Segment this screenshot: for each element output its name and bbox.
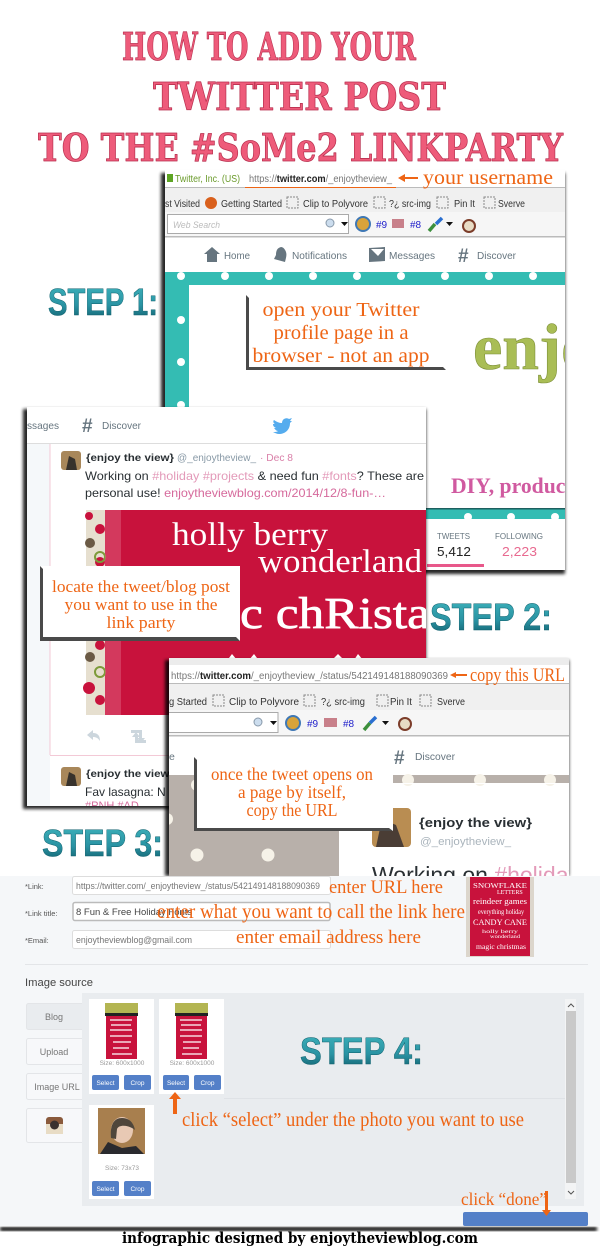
panel: step 1 browser screenshot: Messages — [389, 250, 435, 262]
image card 3 — [89, 1105, 154, 1199]
panel: step 3 tweet page screenshot: {enjoy the view} — [419, 815, 532, 830]
panel: step 1 browser screenshot: Notifications — [292, 250, 347, 262]
panel: step 1 browser screenshot: Pin It — [454, 199, 475, 210]
form thumbnail: LETTERS — [497, 890, 523, 896]
image source tabs: Upload — [40, 1047, 68, 1057]
profile stats: FOLLOWING — [495, 531, 543, 541]
form fields: https://twitter.com/_enjoytheview_/status/542149148188090369 — [76, 881, 320, 892]
panel: step 1 browser screenshot: ?¿ src-img — [389, 199, 431, 210]
profile stats — [427, 531, 543, 567]
form thumbnail: SNOWFLAKE — [473, 882, 527, 890]
panel: step 2 tweet screenshot: # — [82, 416, 93, 437]
callout: step 3: a page by itself, — [238, 782, 346, 802]
form fields: 8 Fun & Free Holiday Fonts — [76, 907, 192, 918]
image card 1 — [89, 999, 154, 1094]
panel: step 2 tweet screenshot: · Dec 8 — [260, 453, 293, 464]
callout: step 1: open your Twitter — [262, 299, 420, 321]
panel: step 1 browser screenshot: Home — [224, 250, 250, 262]
done button — [463, 1212, 588, 1226]
annotation: your username — [245, 165, 553, 189]
annotation: form field labels: enter email address here — [236, 927, 421, 948]
form thumbnail: everything holiday — [478, 908, 524, 916]
panel: step 3 tweet page screenshot: # — [394, 748, 405, 769]
annotation: your username: your username — [423, 165, 553, 189]
callout: step 3: once the tweet opens on — [211, 764, 373, 784]
panel: step 3 tweet page screenshot: @_enjoytheview_ — [420, 836, 512, 848]
image card 2: Size: 600x1000 — [170, 1060, 215, 1067]
annotation: form field labels: enter what you want to call the link here — [157, 901, 465, 923]
panel: step 3 tweet page screenshot: ?¿ src-img — [321, 697, 365, 708]
annotation: click select: click “select” under the photo you want to use — [182, 1109, 524, 1131]
callout: step 2: link party — [106, 613, 176, 632]
panel: step 2 tweet screenshot: @_enjoytheview_ — [177, 453, 256, 464]
callout: step 3: copy the URL — [246, 800, 338, 820]
callout: step 2: locate the tweet/blog post — [52, 577, 230, 596]
profile stats: 5,412 — [437, 544, 471, 559]
tweet avatar — [61, 451, 81, 470]
arrow: points to select button — [169, 1092, 181, 1114]
image card 3: Crop — [130, 1186, 145, 1193]
panel: step 1 browser screenshot: Twitter, Inc. (US) — [175, 174, 240, 185]
tweet image: holly berry wonderland: c chRista — [240, 589, 430, 638]
annotation: click done: click “done” — [461, 1189, 547, 1209]
panel: step 2 tweet screenshot: #PNH #AD — [85, 800, 139, 812]
tweet image: holly berry wonderland: holly berry — [172, 517, 329, 553]
annotation: form field labels — [157, 877, 465, 948]
panel: step 1 browser screenshot: # — [458, 246, 469, 267]
panel: step 3 tweet page screenshot: Pin It — [390, 697, 412, 708]
form fields: enjoytheviewblog@gmail.com — [76, 935, 192, 946]
image source tabs: Blog — [45, 1012, 63, 1022]
footer credit: infographic designed by enjoytheviewblog.com — [122, 1229, 478, 1247]
form thumbnail — [466, 877, 534, 957]
panel: step 2 tweet screenshot: {enjoy the view} — [86, 452, 174, 464]
image card 2: Crop — [200, 1080, 215, 1087]
panel: step 2 tweet screenshot — [23, 407, 430, 812]
panel: step 2 tweet screenshot: personal use! enjoytheviewblog.com/2014/12/8-fun-… — [85, 486, 386, 500]
panel: step 2 tweet screenshot: Fav lasagna: N — [85, 785, 166, 799]
callout: step 3 — [194, 757, 393, 831]
image card 1: Size: 600x1000 — [100, 1060, 145, 1067]
form fields: *Link title: — [25, 909, 58, 918]
form thumbnail: magic christmas — [476, 943, 526, 951]
title: TWITTER POST — [153, 74, 446, 119]
form fields: *Link: — [25, 882, 44, 891]
panel: step 1 browser screenshot: Clip to Polyvore — [303, 199, 368, 210]
step 1 label: STEP 1: — [48, 282, 158, 324]
image source tabs — [26, 1004, 86, 1142]
form fields — [25, 876, 330, 948]
panel: step 1 browser screenshot: Discover — [477, 250, 516, 262]
step 2 label: STEP 2: — [430, 597, 552, 639]
panel: step 3 tweet page screenshot: g Started — [169, 697, 207, 708]
profile stats: TWEETS — [437, 531, 470, 541]
image card 2 — [159, 999, 224, 1094]
panel: step 2 tweet screenshot: Working on #holiday #projects & need fun #fonts? These are — [85, 469, 424, 483]
panel: step 4 link party form — [0, 876, 600, 1231]
image card 2: Select — [167, 1080, 185, 1087]
panel: step 2 tweet screenshot: {enjoy the view} — [86, 768, 174, 780]
panel: step 1 browser screenshot — [161, 165, 600, 574]
panel: step 3 tweet page screenshot: Clip to Polyvore — [229, 697, 299, 708]
panel: step 1 browser screenshot: Web Search — [173, 220, 220, 231]
callout: step 2 — [40, 566, 240, 641]
panel: step 1 browser screenshot: Sverve — [498, 199, 525, 210]
panel: step 3 tweet page screenshot: Discover — [415, 751, 455, 763]
image card 3: Select — [96, 1186, 115, 1193]
profile stats: 2,223 — [502, 544, 537, 559]
title — [38, 24, 564, 170]
panel: step 3 tweet page screenshot — [160, 658, 580, 888]
title: HOW TO ADD YOUR — [122, 24, 416, 69]
panel: step 1 browser screenshot: #9 — [376, 220, 388, 231]
step 3 label: STEP 3: — [42, 823, 163, 865]
panel: step 3 tweet page screenshot: Sverve — [437, 697, 465, 708]
image source tabs: Image URL — [34, 1082, 80, 1092]
profile background with dots — [161, 774, 569, 876]
annotation: form field labels: enter URL here — [329, 877, 443, 898]
callout: step 2: you want to use in the — [64, 595, 218, 614]
panel: step 3 tweet page screenshot: #9 — [307, 719, 319, 730]
form thumbnail: CANDY CANE — [473, 918, 527, 927]
panel: step 2 tweet screenshot: ssages — [27, 420, 59, 432]
image card 1: Crop — [130, 1080, 145, 1087]
step 4 label: STEP 4: — [300, 1031, 423, 1073]
annotation: copy this URL: copy this URL — [470, 665, 565, 686]
arrow: points to done button — [542, 1191, 551, 1216]
form thumbnail: wonderland — [490, 935, 521, 940]
icon: twitter bird — [273, 418, 292, 434]
tweet image: holly berry wonderland: wonderland — [258, 544, 423, 580]
blog tagline: DIY, products — [451, 473, 581, 498]
callout: step 1: profile page in a — [274, 322, 409, 344]
image source heading: Image source — [25, 977, 93, 989]
panel: step 1 browser screenshot: https://twitter.com/_enjoytheview_ — [249, 174, 392, 185]
panel: step 3 tweet page screenshot: https://twitter.com/_enjoytheview_/status/542149148188090369 — [171, 671, 448, 682]
callout: step 1 — [246, 295, 446, 370]
panel: step 3 tweet page screenshot: e — [169, 751, 175, 763]
teal polka dot frame — [165, 272, 565, 521]
scrollbar — [565, 999, 576, 1199]
panel: step 2 tweet screenshot: Discover — [102, 420, 141, 432]
tweet action icons — [87, 730, 146, 743]
panel: step 1 browser screenshot: #8 — [410, 220, 422, 231]
image picker panel — [82, 993, 584, 1206]
image card 3: Size: 73x73 — [105, 1165, 139, 1172]
form fields: *Email: — [25, 936, 49, 945]
image card 1: Select — [96, 1080, 115, 1087]
form thumbnail: reindeer games — [473, 897, 527, 906]
tweet image: holly berry wonderland — [83, 510, 430, 715]
panel: step 1 browser screenshot: Getting Started — [221, 199, 282, 210]
form thumbnail: holly berry — [482, 930, 519, 935]
panel: step 1 browser screenshot: st Visited — [165, 199, 200, 210]
callout: step 1: browser - not an app — [252, 345, 430, 367]
panel: step 3 tweet page screenshot: #8 — [343, 719, 355, 730]
panel: step 3 tweet page screenshot: Working on #holiday — [372, 862, 580, 888]
profile avatar — [372, 808, 411, 847]
